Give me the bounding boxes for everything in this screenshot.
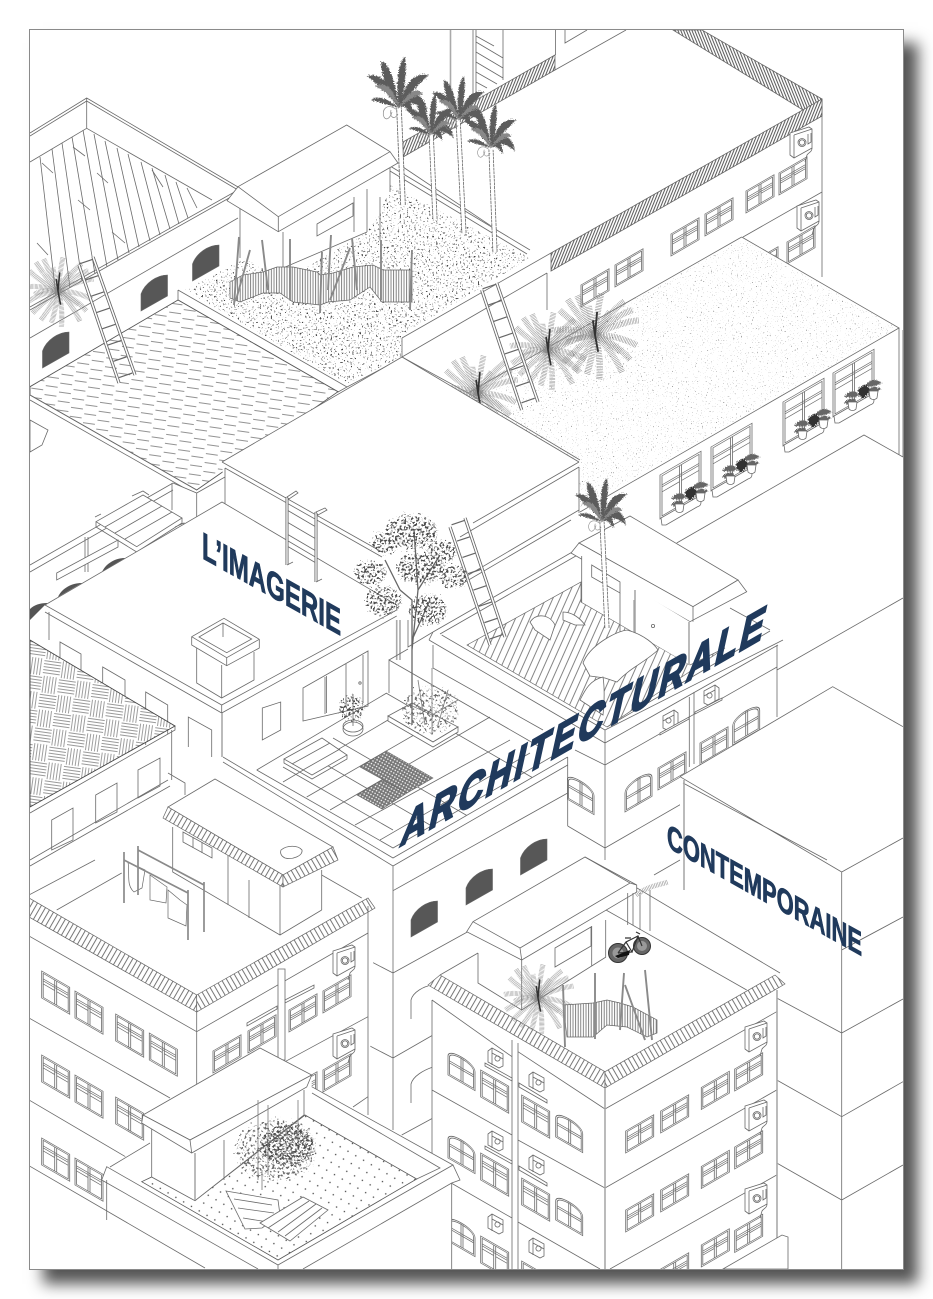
wood plank pallet and left wall [30, 420, 225, 622]
shed on gravel roof [227, 125, 398, 280]
gravel roof [178, 166, 551, 392]
laundry rack [124, 846, 204, 940]
door and windows of main building [60, 642, 368, 757]
shed on the tower roof [467, 857, 650, 1010]
title word: L'IMAGERIE: L’IMAGERIE [202, 524, 341, 644]
basket-weave roof [30, 640, 185, 866]
palm trees on gravel roof [367, 56, 516, 252]
palms on speckled roof [444, 293, 639, 417]
ladder on herringbone roof [79, 257, 135, 383]
palm tree on shed [575, 478, 628, 628]
potted plant and fence on tower roof [504, 882, 668, 1047]
bicycle [608, 932, 650, 962]
blank tall building right [654, 687, 903, 1269]
ladder on central wall [287, 491, 327, 582]
speckled roof building [402, 237, 903, 525]
lower centre building with dark arched windows [222, 756, 568, 1136]
chimney [192, 618, 259, 698]
main white roof building [30, 502, 433, 757]
herringbone roof [30, 300, 338, 493]
shed with hatched roof on left building [163, 779, 338, 935]
ladder on terrace building [450, 518, 505, 645]
lower terrace with dotted floor [102, 1076, 460, 1269]
tower on the right foreground [428, 888, 788, 1269]
shrub and sun loungers on lower terrace [226, 1100, 328, 1241]
shed on lower terrace [142, 1048, 312, 1201]
central block roof with double edge [222, 356, 580, 586]
corrugated fence [230, 235, 412, 313]
building: top right block with hatched parapet [403, 30, 822, 330]
blank building behind [676, 434, 903, 670]
ladder on speckled roof [482, 283, 538, 410]
building: top left with wood-grain roof [24, 98, 238, 368]
tree and shrub on terrace [356, 515, 469, 735]
title word: ARCHITECTURALE: ARCHITECTURALE [397, 594, 771, 858]
left foreground building with hatched eaves [30, 860, 376, 1268]
terrace building with striped deck and shed [429, 516, 783, 860]
tiled terrace [256, 659, 552, 848]
